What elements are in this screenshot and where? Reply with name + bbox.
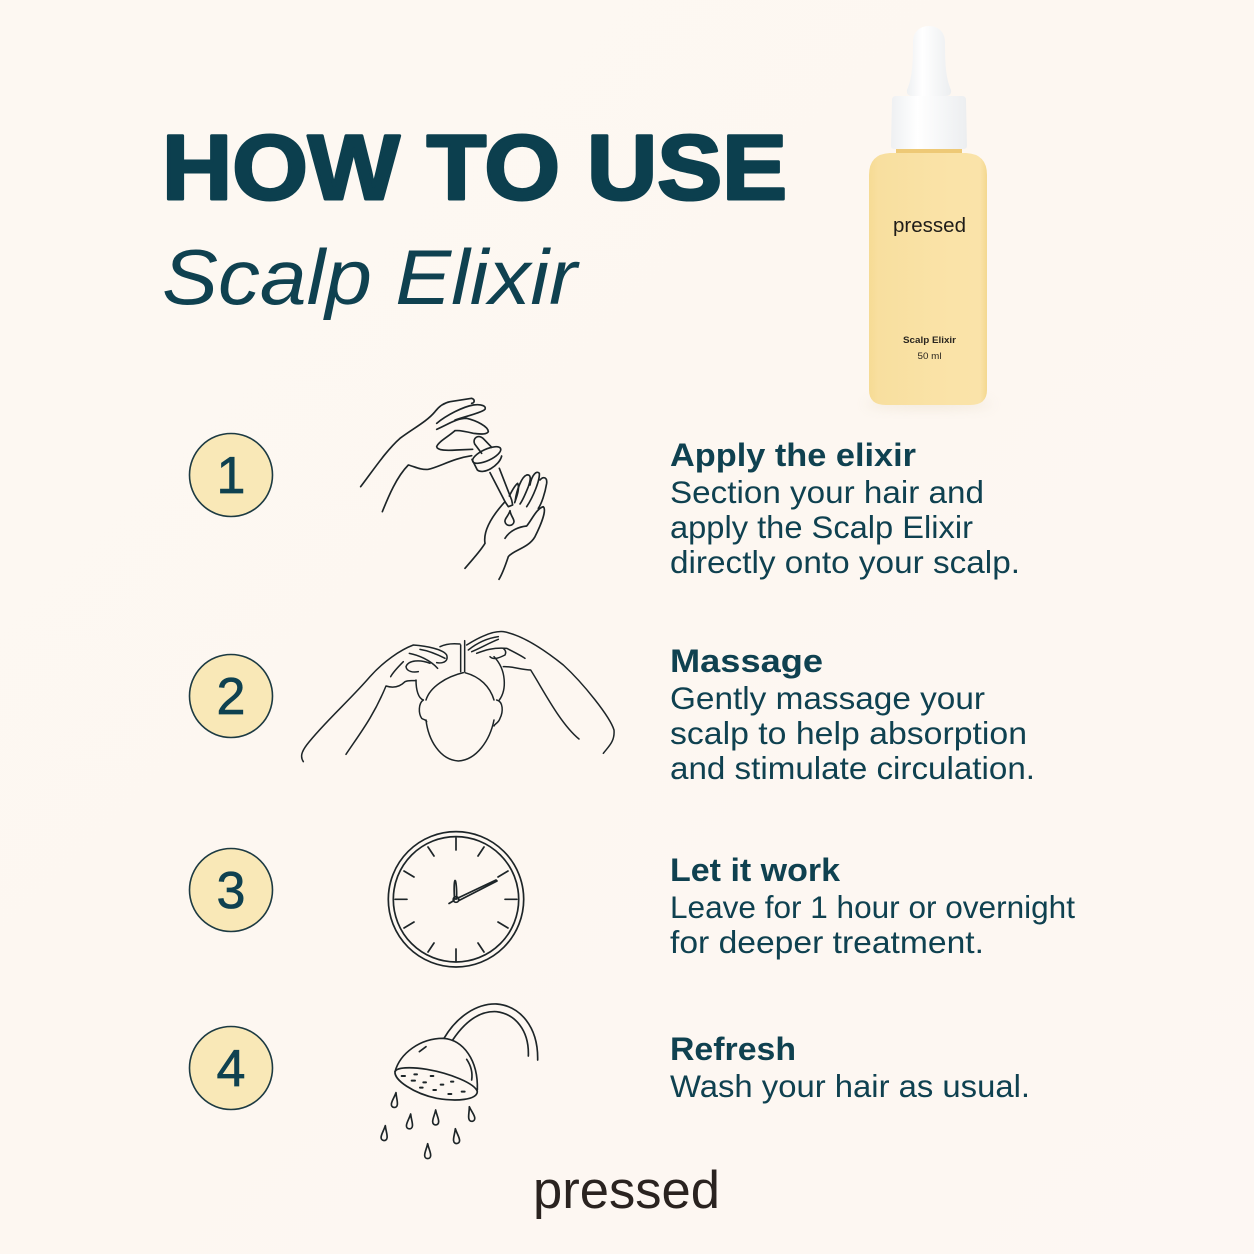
step 1 number badge: 1 (217, 447, 245, 505)
step 2 text: and stimulate circulation. (670, 750, 1035, 786)
step 1 icon: hands applying dropper (361, 398, 547, 579)
step 3 text (670, 852, 1075, 960)
bottle brand label: pressed (893, 215, 966, 237)
step 3 icon: clock (388, 832, 524, 967)
step 1 text: directly onto your scalp. (670, 544, 1020, 580)
step 2 text: scalp to help absorption (670, 715, 1027, 751)
step 3 number badge (190, 848, 272, 932)
step 4 text (670, 1031, 1030, 1104)
footer brand logo: pressed (533, 1161, 720, 1220)
step 1 number badge (190, 434, 272, 516)
bottle product name: Scalp Elixir (903, 335, 956, 346)
step 3 text: Leave for 1 hour or overnight (670, 889, 1075, 925)
step 2 number badge (190, 654, 272, 738)
step 2 icon: hands massaging head (302, 632, 614, 762)
step 4 text: Refresh (670, 1031, 796, 1067)
product bottle (865, 26, 993, 407)
step 4 number badge (190, 1026, 272, 1110)
step 2 text: Massage (670, 643, 823, 679)
step 1 text: apply the Scalp Elixir (670, 509, 973, 545)
step 3 number badge: 3 (217, 862, 245, 920)
step 2 text (670, 643, 1035, 786)
step 2 text: Gently massage your (670, 680, 985, 716)
subtitle: Scalp Elixir (162, 233, 580, 321)
step 4 icon: shower head (381, 1004, 538, 1159)
bottle volume: 50 ml (918, 351, 942, 362)
step 3 text: Let it work (670, 852, 840, 888)
title: HOW TO USE (162, 117, 787, 219)
step 1 text: Apply the elixir (670, 437, 916, 473)
step 3 text: for deeper treatment. (670, 924, 984, 960)
step 1 text: Section your hair and (670, 474, 984, 510)
step 1 text (670, 437, 1020, 580)
step 4 text: Wash your hair as usual. (670, 1068, 1030, 1104)
step 4 number badge: 4 (217, 1040, 245, 1098)
step 2 number badge: 2 (217, 668, 245, 726)
